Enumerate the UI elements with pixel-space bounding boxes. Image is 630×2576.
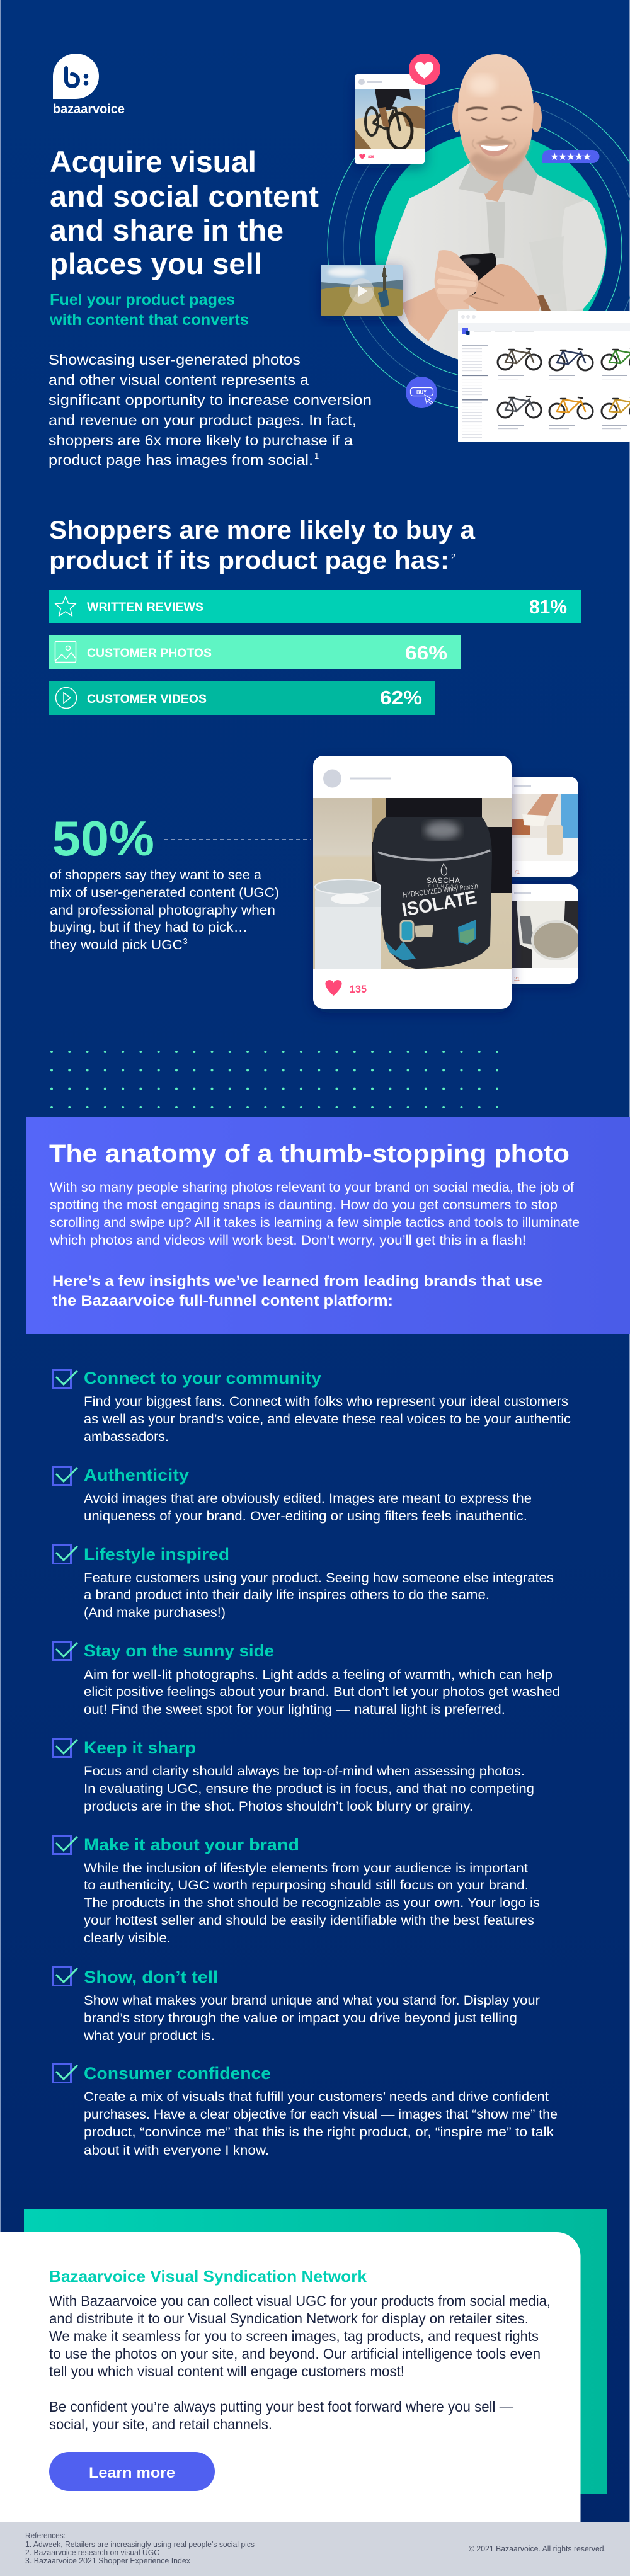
stat: 50 percent: of shoppers say they want to see a [50,868,261,882]
bar: customer videos [49,681,435,715]
panel heading: The anatomy of a thumb-stopping photo [49,1140,570,1168]
references: References: [25,2531,66,2540]
item: lifestyle inspired: Feature customers using your product. Seeing how someone else integrates [84,1571,554,1585]
item: stay on the sunny side: out! Find the sweet spot for your lighting — natural light is preferred. [84,1702,505,1717]
item: consumer confidence: product, “convince me” that this is the right product, or, “inspire me” to talk [84,2125,554,2140]
references [25,2531,255,2565]
item: lifestyle inspired: (And make purchases!) [84,1605,226,1620]
item: consumer confidence: about it with everyone I know. [84,2143,269,2158]
item: stay on the sunny side: Aim for well-lit photographs. Light adds a feeling of warmth, which can help [84,1668,553,1682]
item: show, don't tell: what your product is. [83,2029,215,2043]
item: show, don't tell: Show, don’t tell [84,1968,218,1986]
bar: written reviews: WRITTEN REVIEWS [87,601,203,614]
product captions [498,375,627,426]
syndication heading: Bazaarvoice Visual Syndication Network [49,2267,367,2286]
item: authenticity: uniqueness of your brand. Over-editing or using filters feels inauthentic. [84,1509,527,1524]
bar: written reviews [49,590,581,623]
panel: anatomy [26,1117,630,1334]
syndication text [49,2293,551,2432]
footer [0,2522,630,2576]
photo: protein tub and shaker: SASCHA [427,876,460,885]
side card: bottom [512,884,580,989]
syndication text: Be confident you’re always putting your best foot forward where you sell — [49,2398,513,2415]
eyebrows and eyes [467,107,521,149]
post avatar [358,79,365,85]
syndication text: With Bazaarvoice you can collect visual UGC for your products from social media, [49,2293,551,2309]
main post card: 135 [350,983,367,995]
title [50,145,319,280]
button: learn more [49,2452,215,2491]
logo: Bazaarvoice [53,54,125,117]
item: consumer confidence [53,2064,558,2158]
item: connect to your community [53,1369,571,1444]
intro text: and other visual content represents a [49,372,309,388]
photo: protein tub and shaker: HYDROLYZED Whey Protein [403,881,478,899]
item: make it about your brand: The products in the shot should be recognizable as your own. Your logo is [84,1896,540,1910]
item: keep it sharp: Keep it sharp [84,1738,196,1757]
shirt [386,156,606,359]
item: show, don't tell: brand’s story through the value or impact you drive beyond just telling [84,2011,517,2026]
item: lifestyle inspired: Lifestyle inspired [84,1545,229,1564]
item: authenticity: Avoid images that are obviously edited. Images are meant to express the [84,1491,532,1506]
panel insight: Here’s a few insights we’ve learned from leading brands that use [52,1273,542,1290]
panel text: spotting the most engaging snaps is daunting. How do you get consumers to stop [50,1198,558,1212]
item: keep it sharp [53,1738,534,1814]
syndication text: social, your site, and retail channels. [49,2416,272,2432]
collars [459,162,498,194]
photo: protein tub and shaker [313,798,512,972]
side card: top: 71 [514,869,520,875]
item: stay on the sunny side: Stay on the sunny side [84,1641,274,1660]
bar: customer photos [49,635,461,669]
social post card [355,74,425,164]
watch strap [537,295,551,312]
item: connect to your community: ambassadors. [84,1430,169,1444]
bar: customer videos: 62% [380,687,422,709]
bar: customer photos: CUSTOMER PHOTOS [87,647,212,660]
references: 2. Bazaarvoice research on visual UGC [25,2548,159,2557]
bar: written reviews: 81% [529,596,567,618]
subtitle: Fuel your product pages [50,291,235,309]
copyright: © 2021 Bazaarvoice. All rights reserved. [469,2545,606,2553]
item: keep it sharp: In evaluating UGC, ensure the product is in focus, and that no competing [84,1782,534,1796]
stat: 50 percent: and professional photography when [50,903,275,918]
rings [328,85,630,411]
item: make it about your brand: to authenticity, UGC worth repurposing should still focus on your brand. [84,1878,529,1893]
intro text: shoppers are 6x more likely to purchase if a [49,432,353,448]
intro text [49,351,372,468]
post like [359,154,365,159]
item: lifestyle inspired: a brand product into their daily life inspires others to do the same. [84,1588,490,1602]
sidebar [462,345,488,401]
dot pattern [50,1051,498,1108]
chart heading: Shoppers are more likely to buy a [49,516,476,544]
item: authenticity: Authenticity [84,1466,189,1485]
stat: 50 percent: buying, but if they had to pick… [50,920,248,935]
panel text: With so many people sharing photos relevant to your brand on social media, the job of [50,1180,574,1195]
chart heading: product if its product page has: [49,547,449,574]
references: 1. Adweek, Retailers are increasingly using real people’s social pics [25,2540,255,2549]
head [458,54,534,176]
chart heading: 2 [451,552,455,561]
title: places you sell [50,247,262,280]
item: connect to your community: Find your biggest fans. Connect with folks who represent your ideal customers [84,1394,568,1409]
photo: protein tub and shaker: ISOLATE [400,887,478,921]
social post card: 836 [368,156,375,159]
right hand [463,264,542,312]
heart badge [409,54,440,85]
browser product page [458,311,630,442]
video card [321,265,403,316]
syndication text: to use the photos on your site, and beyond. Our artificial intelligence tools even [49,2345,541,2362]
syndication text: and distribute it to our Visual Syndication Network for display on retailer sites. [49,2310,529,2327]
stat: 50 percent [50,811,279,952]
left forearm [403,288,449,341]
subtitle: with content that converts [49,311,249,329]
chart heading [49,516,476,574]
item: connect to your community: Connect to your community [84,1369,321,1388]
panel insight: the Bazaarvoice full-funnel content platform: [52,1292,393,1309]
side card: bottom: 21 [514,976,520,982]
item: lifestyle inspired [53,1545,554,1620]
play button [349,278,374,304]
smile [479,144,510,156]
item: stay on the sunny side: elicit positive feelings about your brand. But don’t let your photos get washed [84,1685,560,1699]
shopping bag icon [462,328,468,334]
panel text [49,1180,580,1248]
ears [452,102,460,132]
man with phone [385,54,606,384]
buy badge [406,377,437,408]
logo: Bazaarvoice: bazaarvoice [53,102,125,117]
title: Acquire visual [50,145,256,178]
syndication text: We make it seamless for you to screen images, tag products, and request rights [49,2328,539,2344]
side card: top [512,777,580,882]
post photo: mountain bike [355,89,425,149]
item: show, don't tell: Show what makes your brand unique and what you stand for. Display your [84,1993,540,2008]
stat: 50 percent: they would pick UGC [50,938,183,952]
panel text: scrolling and swipe up? All it takes is learning a few simple tactics and tools to illuminate [50,1216,580,1230]
subtitle [49,291,249,329]
bar: customer photos: 66% [405,642,447,664]
item: consumer confidence: purchases. Have a clear objective for each visual — images that “show me” the [84,2107,558,2122]
bar chart [49,590,581,715]
item: keep it sharp: Focus and clarity should always be top-of-mind when assessing photos. [84,1764,525,1779]
intro text: Showcasing user-generated photos [49,351,301,368]
item: show, don't tell [53,1968,540,2043]
photo cards [313,756,580,1009]
intro text: product page has images from social. [49,452,313,468]
stat: 50 percent: 3 [183,937,188,946]
item: connect to your community: as well as your brand’s voice, and elevate these real voices to be your authentic [84,1412,571,1427]
intro text: significant opportunity to increase conversion [49,392,372,408]
title: and share in the [50,214,284,247]
buy badge: BUY [416,389,427,396]
photo: protein tub and shaker: FITNESS [428,885,458,889]
item: consumer confidence: Consumer confidence [84,2064,271,2083]
panel insight [52,1273,542,1309]
intro text: and revenue on your product pages. In fact, [49,412,357,428]
stat: 50 percent: mix of user-generated content (UGC) [50,886,279,900]
intro text: 1 [314,451,319,460]
panel: visual syndication network [0,2209,607,2522]
item: stay on the sunny side [53,1641,560,1717]
item: make it about your brand: your hottest seller and should be easily identifiable with the best features [84,1913,534,1928]
bikes [498,348,541,370]
neck [475,168,510,202]
button: learn more: Learn more [89,2465,175,2482]
bar: customer videos: CUSTOMER VIDEOS [87,693,207,706]
item: consumer confidence: Create a mix of visuals that fulfill your customers’ needs and drive confident [84,2090,549,2104]
like count [325,980,342,996]
item: keep it sharp: products are in the shot. Photos shouldn’t look blurry or grainy. [84,1799,473,1814]
item: authenticity [53,1466,532,1524]
item: make it about your brand: clearly visible. [84,1931,171,1946]
main post card [313,756,512,1009]
item: make it about your brand: Make it about your brand [84,1835,299,1854]
stat: 50 percent: 50% [52,811,154,866]
rating badge [542,150,600,163]
item: make it about your brand [53,1835,540,1946]
hero illustration [321,54,630,442]
syndication text: tell you which visual content will engage customers most! [49,2363,404,2379]
left hand [435,250,479,310]
moustache shadow [476,139,513,145]
references: 3. Bazaarvoice 2021 Shopper Experience Index [25,2556,191,2565]
item: make it about your brand: While the inclusion of lifestyle elements from your audience is important [84,1861,528,1876]
rating badge: ★★★★★ [550,152,592,162]
phone [459,253,496,297]
title: and social content [50,180,319,213]
panel text: which photos and videos will work best. Don’t worry, you’ll get this in a flash! [49,1233,526,1248]
dashed connector [164,839,311,840]
teal circle [375,132,607,364]
